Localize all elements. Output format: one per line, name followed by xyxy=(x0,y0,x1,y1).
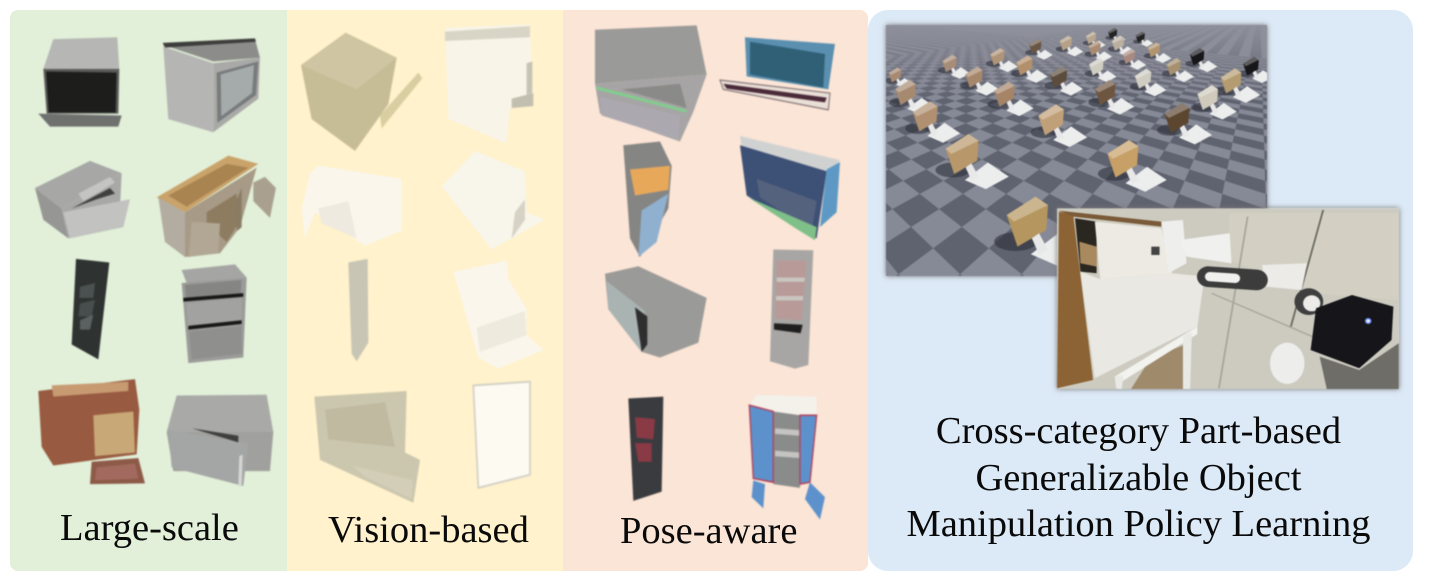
panel: vision-based xyxy=(287,10,563,571)
caption: vision-based: Vision-based xyxy=(328,509,529,551)
panel: policy learning xyxy=(868,10,1413,571)
panel: large-scale xyxy=(10,10,287,571)
caption: cross-category policy learning: Cross-category Part-based xyxy=(936,410,1341,452)
real robot image: arm opening a cabinet drawer xyxy=(1057,208,1399,389)
caption: large-scale: Large-scale xyxy=(60,507,239,549)
simulation image: checkerboard floor with many cabinets xyxy=(886,25,1267,276)
caption: cross-category policy learning: Manipulation Policy Learning xyxy=(906,503,1371,545)
panel: pose-aware xyxy=(563,10,868,571)
caption: cross-category policy learning xyxy=(906,410,1371,545)
caption: cross-category policy learning: Generalizable Object xyxy=(976,456,1302,498)
caption: pose-aware: Pose-aware xyxy=(620,510,797,552)
